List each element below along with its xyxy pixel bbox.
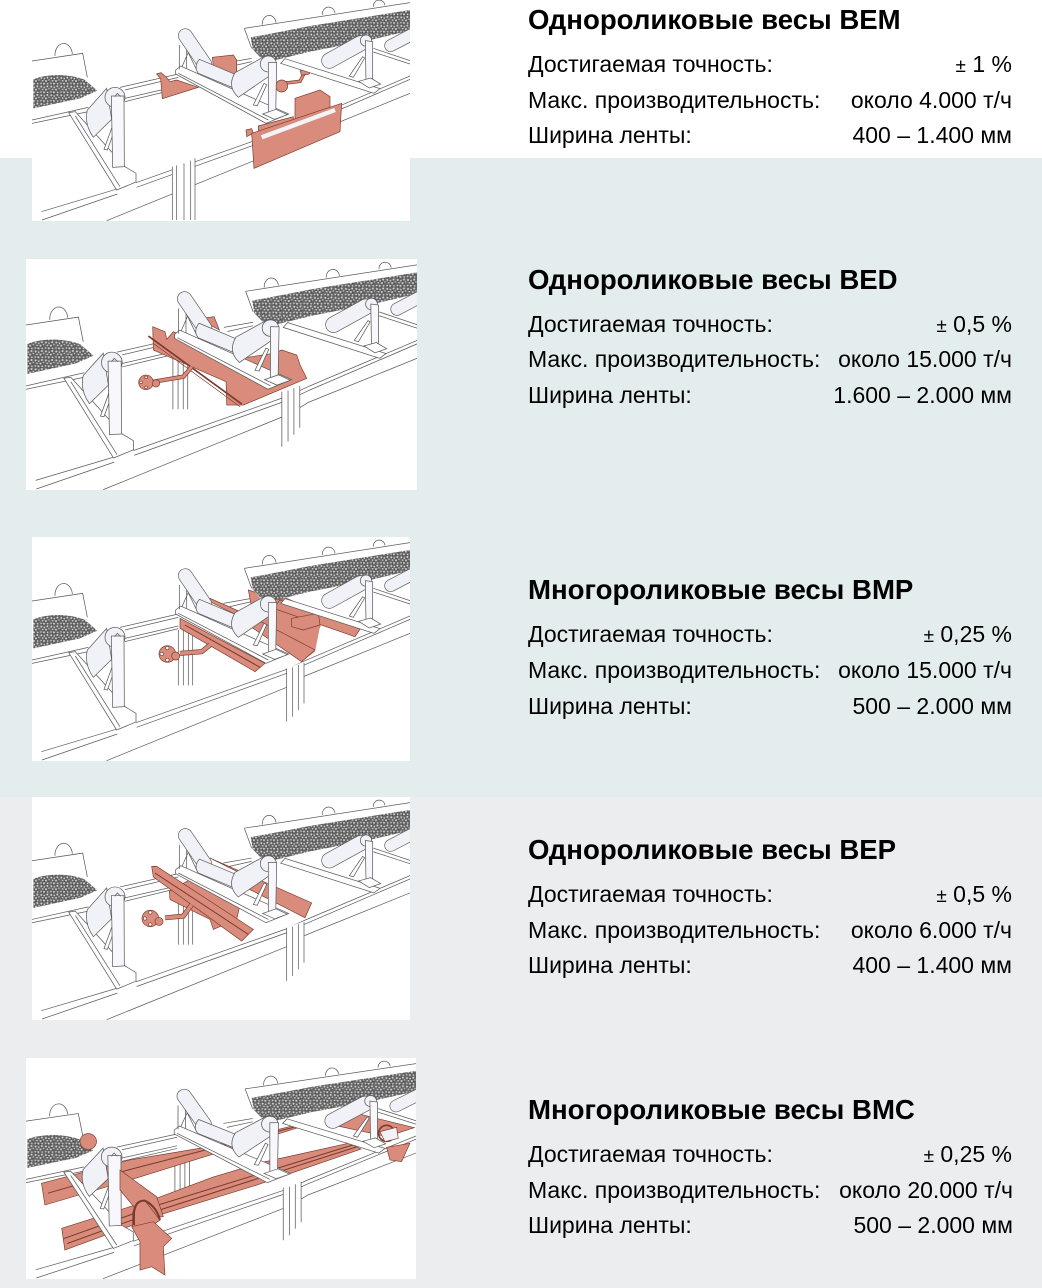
row: capacity (528, 346, 1012, 372)
row: capacity: Макс. производительность: (528, 917, 820, 943)
heading: BMP: Многороликовые весы BMP (528, 574, 913, 605)
scale parts: BMP (159, 590, 362, 672)
scale parts: BMC, rails (41, 1114, 414, 1250)
row: capacity: Макс. производительность: (528, 657, 820, 683)
row: belt width: Ширина ленты: (528, 1212, 692, 1238)
text block: BEM (528, 4, 1012, 148)
scale parts: BED (139, 317, 307, 407)
panel: BEP illustration (32, 797, 410, 1020)
scale parts: BMC, brackets (120, 1125, 410, 1275)
row: capacity (528, 917, 1012, 943)
panel: BMP illustration (32, 537, 410, 761)
row: belt width (528, 122, 1012, 148)
support post: BEM (172, 158, 195, 220)
text block: BMP (528, 574, 1012, 719)
row: accuracy: Достигаемая точность: (528, 51, 773, 77)
row: capacity: около 4.000 т/ч (851, 87, 1012, 113)
panel: BMC illustration (26, 1058, 416, 1279)
panel: BED illustration (26, 259, 417, 490)
row: capacity: Макс. производительность: (528, 346, 820, 372)
row: belt width (528, 1212, 1013, 1238)
scale parts: BEP (142, 858, 312, 941)
background band: teal (0, 158, 1042, 797)
row: belt width (528, 693, 1012, 719)
row: belt width: 1.600 – 2.000 мм (833, 382, 1012, 408)
heading: BEM: Однороликовые весы BEM (528, 4, 901, 35)
row: capacity (528, 87, 1012, 113)
row: accuracy: ± 0,5 % (936, 881, 1012, 907)
row: belt width: Ширина ленты: (528, 122, 692, 148)
row: accuracy (528, 51, 1012, 77)
row: capacity (528, 657, 1012, 683)
row: accuracy: Достигаемая точность: (528, 311, 773, 337)
row: belt width: 400 – 1.400 мм (852, 952, 1012, 978)
row: accuracy: ± 1 % (956, 51, 1012, 77)
row: capacity: Макс. производительность: (528, 1177, 820, 1203)
row: accuracy: ± 0,5 % (936, 311, 1012, 337)
row: capacity: около 6.000 т/ч (851, 917, 1012, 943)
text block: BED (528, 264, 1012, 408)
row: accuracy (528, 881, 1012, 907)
scale parts: BEM (157, 55, 342, 168)
background band: grey (0, 797, 1042, 1288)
row: belt width: Ширина ленты: (528, 382, 692, 408)
row: belt width: Ширина ленты: (528, 952, 692, 978)
row: accuracy: ± 0,25 % (924, 1141, 1012, 1167)
row: accuracy (528, 1141, 1012, 1167)
row: belt width: Ширина ленты: (528, 693, 692, 719)
row: accuracy: ± 0,25 % (924, 621, 1012, 647)
row: accuracy (528, 311, 1012, 337)
text block: BEP (528, 834, 1012, 978)
row: capacity: около 20.000 т/ч (839, 1177, 1013, 1203)
centre posts: BMC (175, 1160, 189, 1193)
row: belt width: 400 – 1.400 мм (852, 122, 1012, 148)
row: capacity: около 15.000 т/ч (838, 657, 1012, 683)
row: accuracy: Достигаемая точность: (528, 1141, 773, 1167)
row: accuracy: Достигаемая точность: (528, 881, 773, 907)
text block: BMC (528, 1094, 1013, 1238)
heading: BMC: Многороликовые весы BMC (528, 1094, 915, 1125)
row: accuracy (528, 621, 1012, 647)
row: accuracy: Достигаемая точность: (528, 621, 773, 647)
row: belt width: 500 – 2.000 мм (853, 1212, 1013, 1238)
row: belt width (528, 382, 1012, 408)
heading: BED: Однороликовые весы BED (528, 264, 898, 295)
row: belt width: 500 – 2.000 мм (852, 693, 1012, 719)
row: capacity (528, 1177, 1013, 1203)
row: belt width (528, 952, 1012, 978)
panel: BEM illustration (32, 0, 410, 221)
heading: BEP: Однороликовые весы BEP (528, 834, 896, 865)
row: capacity: Макс. производительность: (528, 87, 820, 113)
row: capacity: около 15.000 т/ч (838, 346, 1012, 372)
